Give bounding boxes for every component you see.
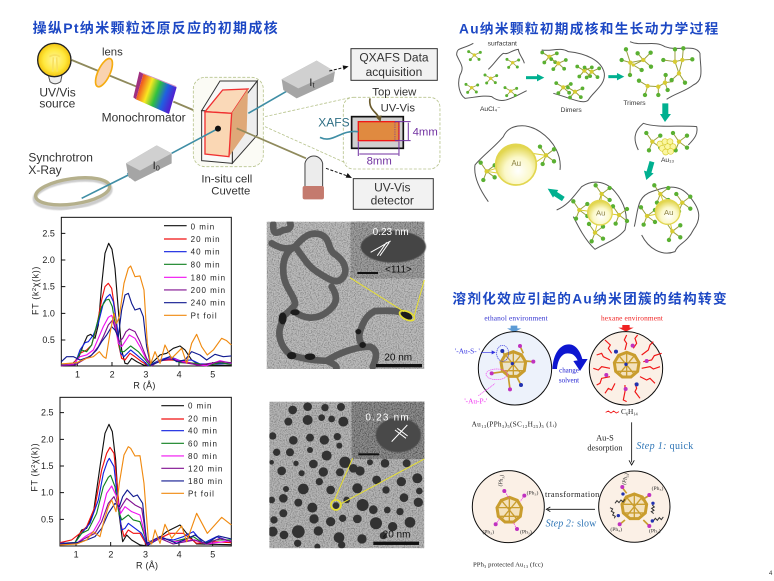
legend: 80 min: [191, 260, 221, 269]
circle: PPh3-protected Au13: (Ph₃): [497, 474, 506, 487]
arrow: change solvent: [552, 344, 588, 371]
legend: 120 min: [188, 464, 223, 473]
legend: [164, 222, 226, 320]
arrow: [548, 189, 563, 199]
circle: PPh3-protected Au13: (Ph₃): [520, 528, 532, 535]
inset: HRTEM lattice: 0.23 nm: [365, 413, 409, 424]
axis labels: 3: [143, 549, 148, 559]
stage: larger nanoparticle with ligands: [557, 182, 629, 249]
icon: It detector: I: [309, 77, 312, 89]
label: change solvent: solvent: [559, 376, 579, 384]
label: Au-S desorption: desorption: [587, 444, 623, 453]
axis labels: 0.5: [42, 335, 55, 345]
circle: ethanol environment: [478, 313, 552, 405]
callout: Au-P: [464, 384, 495, 405]
circle: hexane environment: hexane environment: [601, 313, 663, 322]
legend: C6H14: C: [621, 407, 626, 416]
arrow: [660, 103, 671, 122]
inset: HRTEM lattice: [351, 222, 426, 278]
circle: PPh3-protected Au13: (Ph₃): [482, 528, 494, 535]
stage: AuCl4 precursors: surfactant: [488, 41, 517, 48]
circle: ethanol environment: ethanol environment: [484, 313, 548, 322]
data curves: [60, 424, 231, 546]
circle: after desorption: (Ph₃): [649, 527, 661, 534]
icon: UV-Vis detector tube: [303, 156, 324, 199]
legend: Pt foil: [188, 489, 215, 498]
legend: 80 min: [188, 452, 218, 461]
dimensions: 4mm and 8mm: 4mm: [413, 127, 438, 139]
legend: C6H14: H: [628, 407, 634, 416]
panel: Pt in-situ setup schematic: [28, 20, 440, 213]
inset: HRTEM lattice: 0.23 nm: [373, 227, 409, 238]
circle: after desorption: (Ph₃): [652, 485, 663, 492]
arrow: to UV-Vis detector: [326, 168, 352, 178]
axis labels: 2: [108, 549, 113, 559]
title: Pt nucleation: 操纵Pt纳米颗粒还原反应的初期成核: [33, 20, 278, 36]
chart: FT curves, nanoparticle series: [30, 397, 231, 570]
label: Synchrotron X-Ray: Synchrotron: [28, 151, 93, 165]
label: UV/Vis source: UV/Vis: [39, 86, 76, 100]
panel: Au nucleation and growth: [457, 20, 719, 253]
stage: trimers: [619, 42, 701, 107]
icon: I0 detector: I: [153, 160, 156, 172]
label: UV/Vis source: [39, 86, 76, 111]
label: in-situ cell cuvette: [201, 174, 252, 197]
axis labels: 1: [75, 369, 80, 379]
axis labels: 1.5: [41, 461, 53, 471]
arrow: UV-Vis into cell: [370, 98, 382, 122]
label: Synchrotron X-Ray: X-Ray: [28, 163, 62, 177]
axis labels: 1.0: [42, 308, 55, 318]
circle: hexane environment: [589, 313, 663, 405]
label: XAFS: XAFS: [318, 116, 350, 130]
axis labels: 2.5: [41, 408, 53, 418]
icon: monochromator prism: [133, 72, 177, 114]
stage: larger nanoparticle with ligands: Au: [596, 209, 605, 218]
box: QXAFS data acquisition: QXAFS Data: [359, 51, 429, 65]
label: in-situ cell cuvette: In-situ cell: [201, 174, 252, 186]
legend: 240 min: [191, 299, 226, 308]
arrow: [526, 74, 544, 81]
legend: 200 min: [191, 286, 226, 295]
legend: [161, 402, 223, 498]
callout: Au-S: [455, 346, 496, 355]
chart frame and ticks: [61, 217, 231, 366]
label: PPh3-protected Au13 (fcc): PPh₃ protected Au₁₃ (fcc): [473, 561, 543, 568]
label: Monochromator: Monochromator: [102, 111, 186, 125]
legend: 0 min: [191, 222, 215, 231]
arrow: XAFS into cell: [320, 131, 358, 139]
axis labels: [30, 228, 215, 390]
beam: UV-Vis light path: [72, 60, 205, 115]
box: QXAFS data acquisition: acquisition: [366, 65, 422, 79]
arrow: step 1: [629, 422, 634, 465]
beam: X-ray path: [172, 89, 290, 153]
axis labels: 4: [177, 369, 182, 379]
axis labels: 5: [210, 369, 215, 379]
stage: large Au nanoparticle: [475, 126, 560, 202]
legend: 60 min: [188, 439, 218, 448]
circle: PPh3-protected Au13: (Ph₃): [527, 489, 538, 496]
axis labels: 1.0: [41, 488, 53, 498]
panel: solvation-induced transformation: [452, 290, 727, 568]
stage: trimers: Trimers: [623, 100, 646, 107]
axis labels: 2.0: [41, 434, 53, 444]
label: change solvent: change: [559, 366, 579, 374]
legend: 40 min: [188, 427, 218, 436]
label: in-situ cell cuvette: Cuvette: [211, 185, 250, 197]
axis labels: 0.5: [41, 514, 53, 524]
label: transformation: transformation: [545, 490, 600, 499]
icon: sample cell top view: [352, 117, 403, 148]
arrow: [608, 73, 624, 80]
stage: AuCl4 precursors: AuCl₄⁻: [480, 106, 501, 113]
title: structural transformation: 溶剂化效应引起的Au纳米团簇的结构转变: [452, 290, 727, 306]
circle: after desorption: (Ph₃): [620, 472, 630, 485]
icon: I0 detector: 0: [156, 164, 160, 173]
axis labels: FT (k²χ(k)): [30, 443, 40, 492]
scale bar: 20 nm: 20 nm: [383, 529, 410, 540]
label: UV-Vis: UV-Vis: [381, 103, 415, 115]
stage: AuCl4 precursors: [457, 41, 527, 113]
stage: Au nanoparticle with ligands: Au: [664, 208, 673, 217]
legend: C6H14: 6: [626, 411, 629, 416]
legend: 180 min: [188, 477, 223, 486]
axis labels: 2.5: [42, 228, 55, 238]
label: step 1 quick: Step 1: quick: [636, 441, 693, 452]
label: formula: Au₁₃(PPh₃)₅(SC₁₂H₂₅)₅ (1ᵢ): [472, 419, 557, 428]
label: lens: lens: [102, 46, 123, 58]
arrow: [644, 162, 654, 180]
stage: Au13: Au₁₃: [661, 157, 674, 164]
icon: I0 detector: [126, 145, 172, 182]
data curves: [61, 243, 231, 366]
label: Synchrotron X-Ray: [28, 151, 93, 177]
legend: C6H14: [606, 407, 639, 416]
box: UV-Vis detector: detector: [371, 194, 414, 208]
page number: 4: [769, 571, 773, 577]
legend: 20 min: [188, 415, 218, 424]
label: step 2 slow: Step 2: slow: [546, 519, 597, 530]
label: Top view: Top view: [372, 87, 417, 99]
callout: Au-P: '-Au-P-': [464, 396, 488, 405]
scale bar: 20 nm: 20 nm: [384, 352, 412, 363]
box: UV-Vis detector: [353, 179, 433, 209]
stage: large Au nanoparticle: Au: [511, 159, 521, 168]
legend: Pt foil: [191, 311, 218, 320]
icon: synchrotron ring: [33, 174, 112, 213]
label: change solvent: [559, 366, 579, 384]
arrow: to data acquisition: [329, 65, 349, 71]
icon: It detector: [282, 61, 335, 98]
image: TEM nanowires: [267, 222, 426, 370]
axis labels: R (Å): [133, 380, 155, 390]
image: TEM nanoparticles: [268, 402, 424, 550]
legend: 0 min: [188, 402, 213, 411]
title: Au growth kinetics: Au纳米颗粒初期成核和生长动力学过程: [459, 20, 719, 36]
axis labels: 1: [74, 549, 79, 559]
callout: yellow zoom lines: [350, 278, 424, 323]
axis labels: FT (k²χ(k)): [30, 267, 40, 315]
panel outline: in-situ cell: [193, 77, 263, 167]
stage: dimers: [540, 49, 604, 114]
dimensions: 4mm and 8mm: 8mm: [367, 155, 392, 167]
dimensions: 4mm and 8mm: [358, 122, 438, 167]
chart frame and ticks: [60, 397, 231, 546]
arrow: X-ray into I0: [82, 172, 134, 198]
axis labels: 2: [110, 369, 115, 379]
axis labels: 5: [210, 549, 215, 559]
box: UV-Vis detector: UV-Vis: [374, 181, 411, 195]
callout: Au-S: '-Au-S- ': [455, 346, 481, 355]
label: Au-S desorption: Au-S: [596, 433, 614, 442]
stage: dimers: Dimers: [561, 107, 582, 114]
circle: after desorption: [599, 471, 670, 542]
circle: PPh3-protected Au13: [472, 471, 544, 543]
icon: cuvette: [202, 81, 257, 163]
axis labels: 3: [143, 369, 148, 379]
axis labels: 1.5: [42, 282, 55, 292]
callout: yellow zoom lines: [331, 458, 424, 510]
scale bar: 20 nm: [373, 529, 419, 545]
icon: lens: [92, 56, 116, 89]
label: UV/Vis source: source: [39, 97, 76, 111]
legend: 40 min: [191, 248, 221, 257]
label: Au-S desorption: [587, 433, 623, 453]
legend: 180 min: [191, 273, 226, 282]
inset: HRTEM lattice: [352, 402, 424, 459]
box: QXAFS data acquisition: [351, 49, 437, 80]
inset: HRTEM lattice: <111>: [385, 264, 412, 275]
axis labels: 2.0: [42, 255, 55, 265]
legend: C6H14: 14: [633, 411, 639, 416]
circle: after desorption: (Ph₃): [610, 526, 622, 533]
axis labels: R (Å): [136, 560, 158, 570]
scale bar: 20 nm: [376, 352, 422, 367]
stage: Au nanoparticle with ligands: [634, 183, 699, 253]
legend: 20 min: [191, 235, 221, 244]
panel outline: top view: [265, 97, 440, 169]
icon: light bulb source: [38, 43, 71, 84]
stage: Au13: [635, 123, 697, 164]
arrow: step 2: [546, 507, 595, 512]
chart: FT curves, nanowire series: [30, 217, 231, 390]
icon: It detector: t: [312, 81, 315, 90]
beam: UV-Vis to detector: [237, 128, 306, 158]
axis labels: 4: [177, 549, 182, 559]
axis labels: [30, 408, 215, 570]
